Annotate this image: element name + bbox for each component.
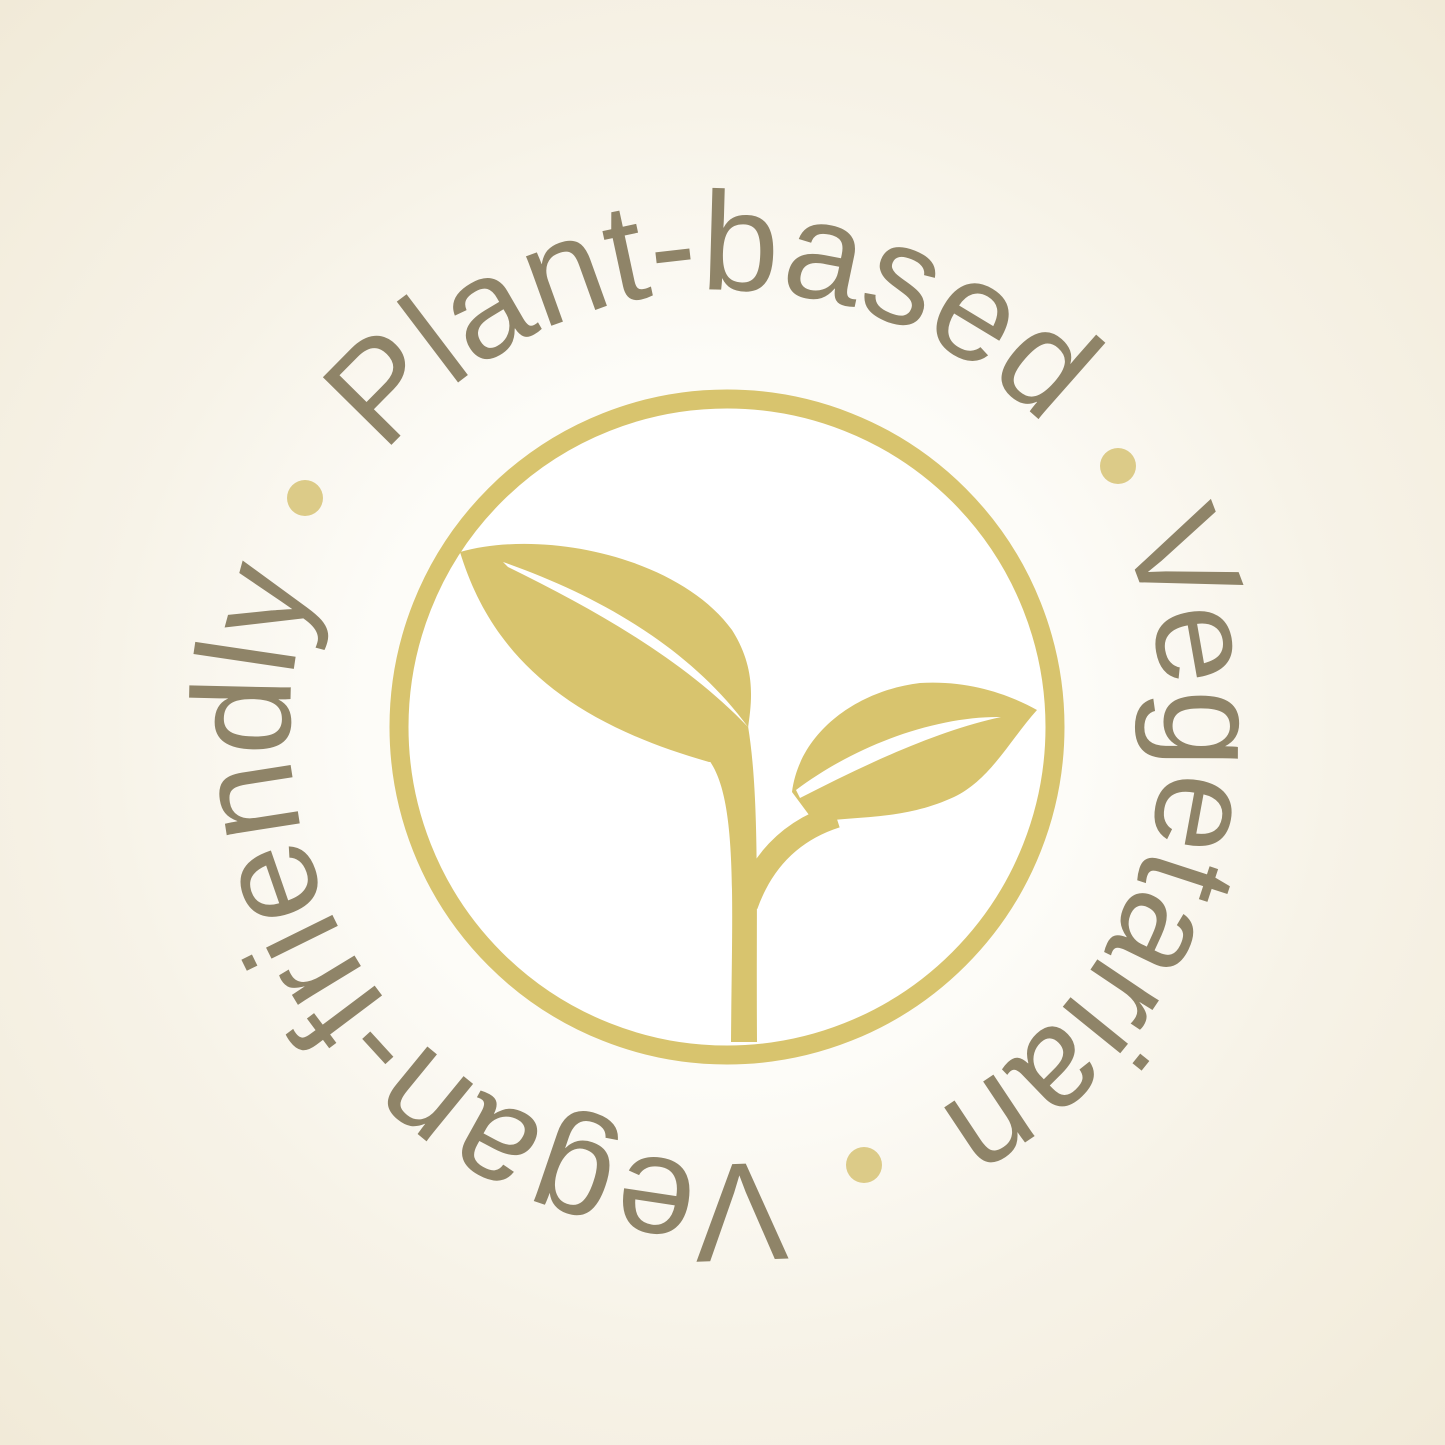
leaf veins bbox=[503, 562, 748, 727]
label: Vegetarian: Vegetarian bbox=[944, 499, 1244, 1162]
stem bbox=[709, 726, 757, 1042]
big leaf bbox=[460, 544, 752, 762]
white inner disc bbox=[399, 399, 1055, 1055]
icon: sprout bbox=[460, 544, 1037, 1042]
circular text labels bbox=[189, 188, 1244, 1262]
branch bbox=[746, 816, 836, 905]
gold ring bbox=[399, 399, 1055, 1055]
label: Vegan-friendly: Vegan-friendly bbox=[189, 560, 788, 1262]
small leaf bbox=[792, 683, 1037, 823]
label: Plant-based: Plant-based bbox=[323, 188, 1106, 445]
separator dots bbox=[287, 448, 1136, 1183]
